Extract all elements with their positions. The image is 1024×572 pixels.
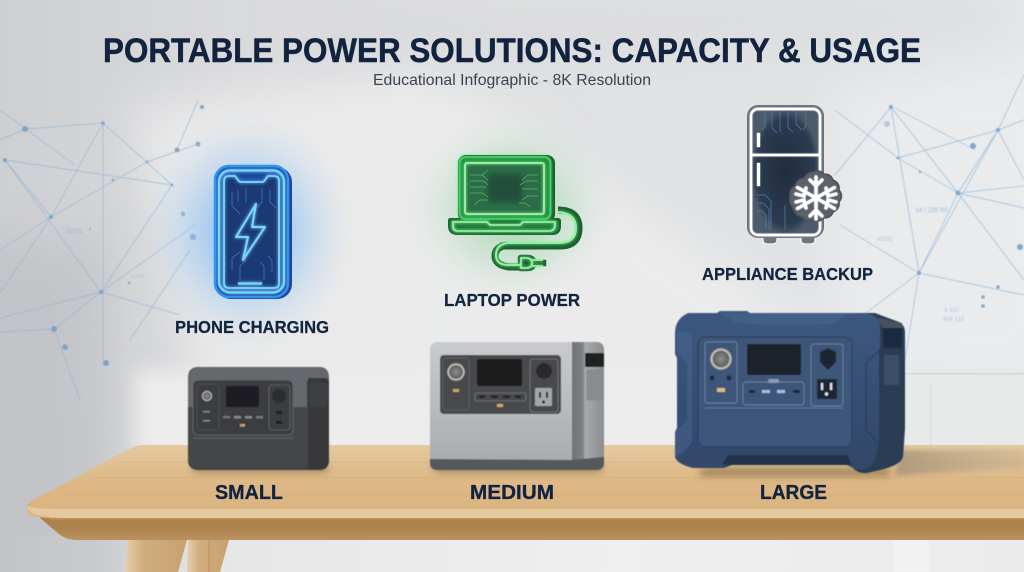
network graph: right: 404 110 <box>943 317 965 323</box>
network graph: right: x0031 <box>877 237 894 243</box>
label: phone charging: PHONE CHARGING <box>175 317 329 337</box>
device: large power station <box>675 311 905 473</box>
label: laptop power: LAPTOP POWER <box>444 290 580 310</box>
device: medium power station <box>430 342 604 470</box>
network graph: right: 4 110 <box>944 308 959 314</box>
device shadows on table <box>192 465 890 476</box>
network graph: left <box>0 100 204 400</box>
network graph: right <box>835 75 1024 360</box>
label: medium: MEDIUM <box>470 482 554 504</box>
network graph: right: 14 / 235 90 <box>915 207 948 214</box>
title: PORTABLE POWER SOLUTIONS: CAPACITY & USAGE <box>103 32 921 70</box>
table <box>27 445 1024 572</box>
subtitle: Educational Infographic - 8K Resolution <box>373 72 651 89</box>
icon: phone with lightning bolt <box>143 114 353 350</box>
label: appliance backup: APPLIANCE BACKUP <box>702 264 873 284</box>
label: large: LARGE <box>760 482 827 504</box>
label: small: SMALL <box>215 482 283 504</box>
device: small power station <box>188 367 329 470</box>
icon: refrigerator with snowflake <box>747 105 842 244</box>
network graph: left: x0010 <box>130 274 145 280</box>
network graph: left: 10031 <box>66 229 83 235</box>
icon: laptop with plug <box>407 113 617 303</box>
